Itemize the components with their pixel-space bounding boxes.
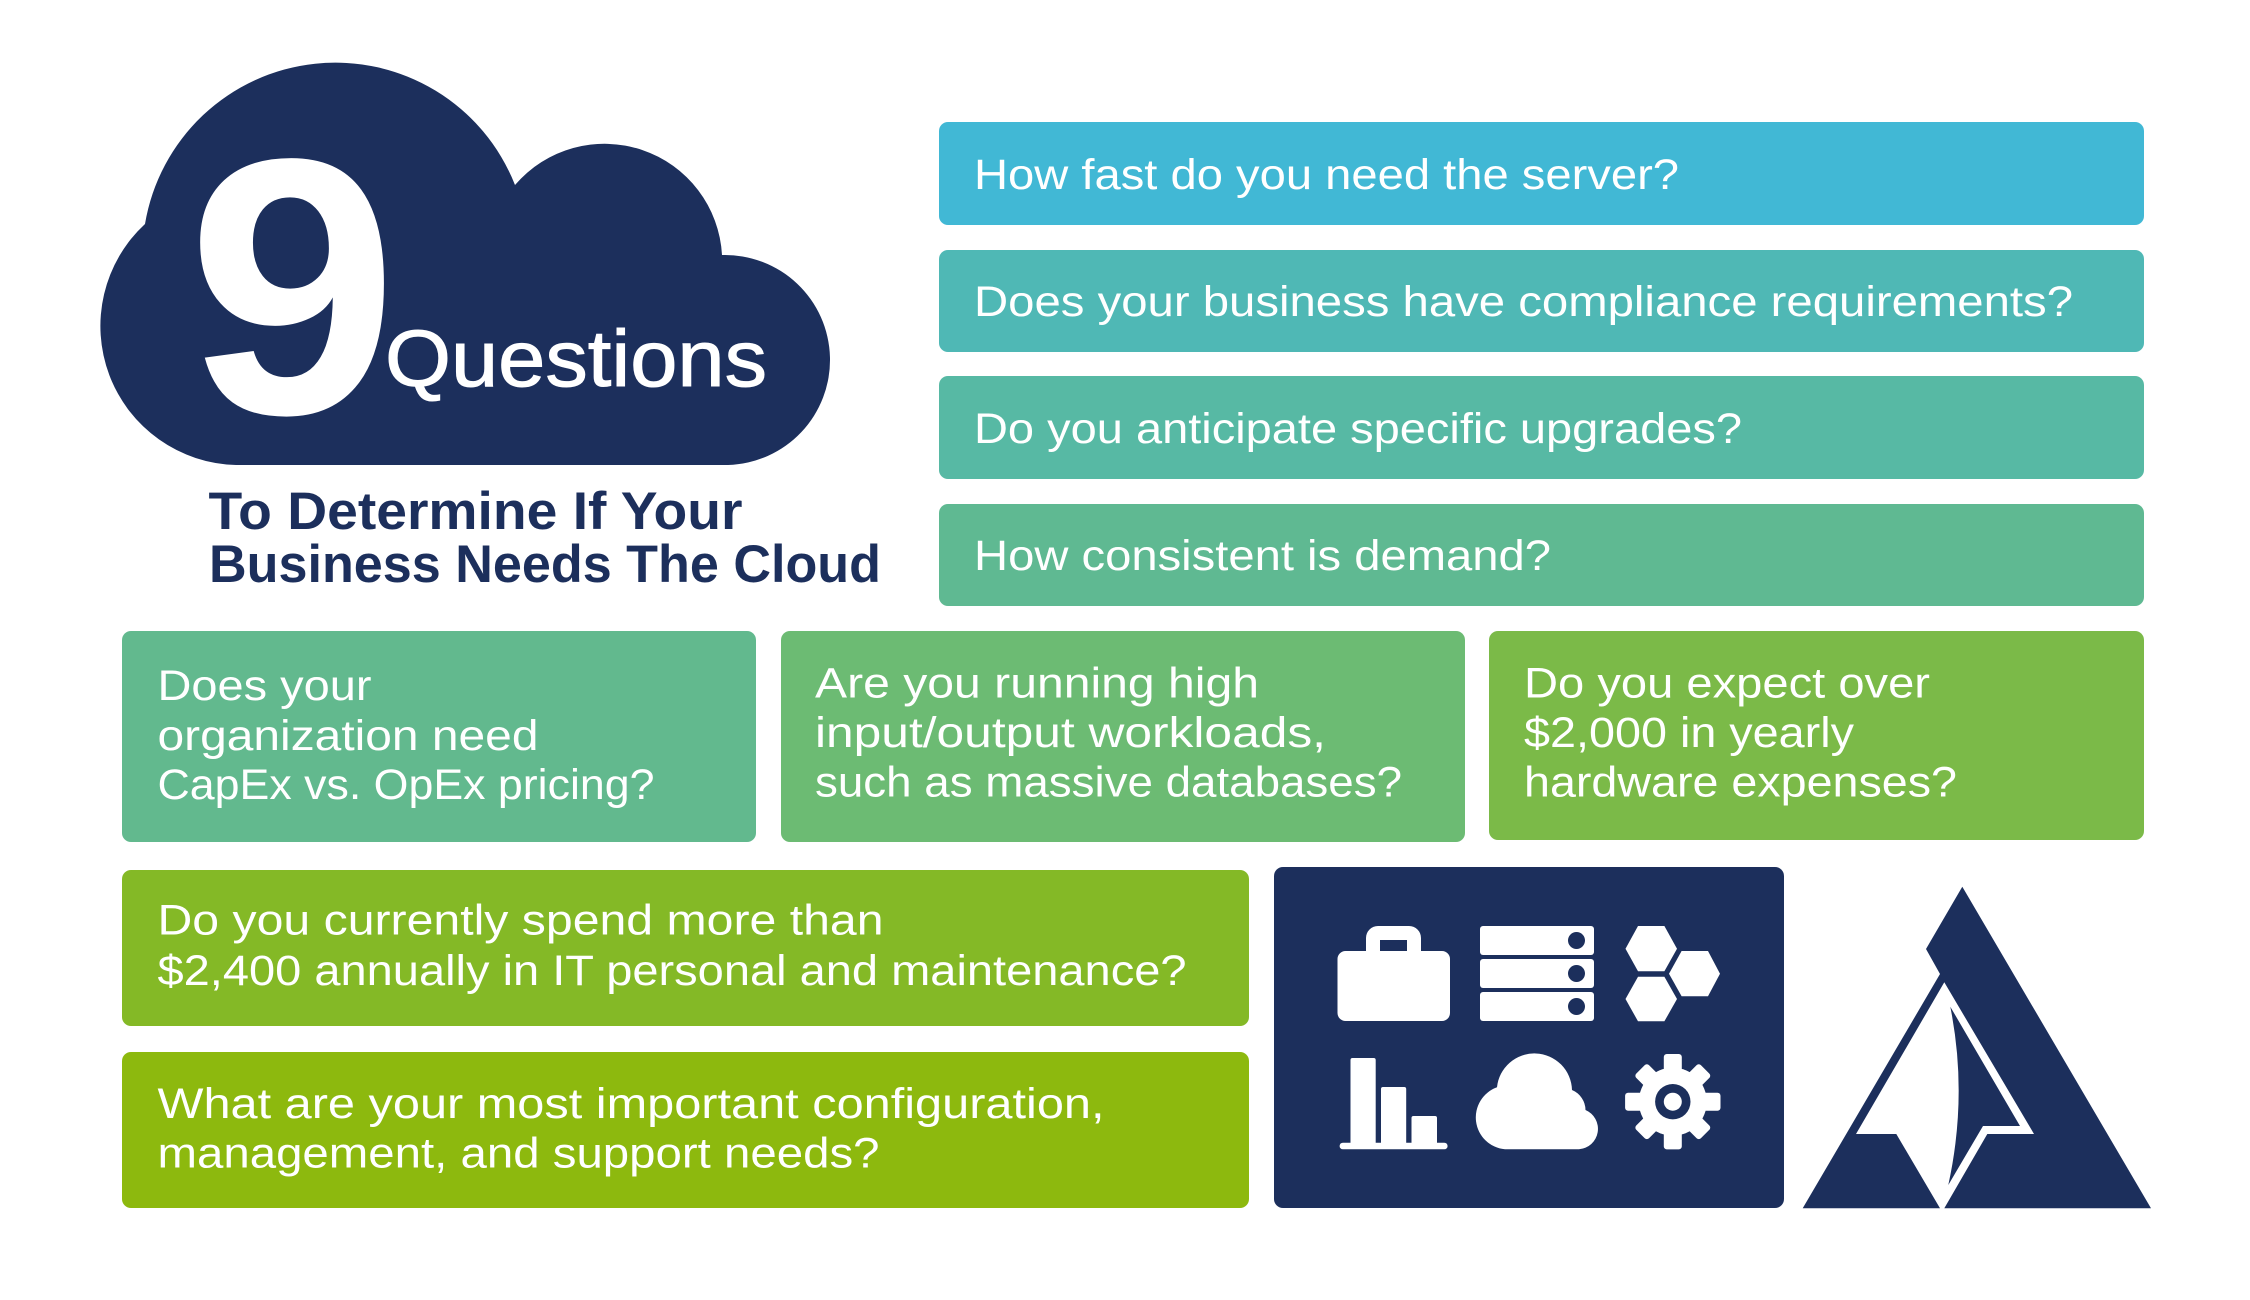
subtitle: Business Needs The Cloud	[209, 535, 881, 594]
cloud shape	[100, 63, 830, 465]
icon: briefcase	[1338, 926, 1450, 1021]
question 5 text: CapEx vs. OpEx pricing?	[158, 761, 654, 809]
question 9 text: management, and support needs?	[158, 1130, 880, 1178]
question panel 3	[939, 376, 2144, 479]
question 6 text: Are you running high	[815, 660, 1259, 708]
question 3 text: Do you anticipate specific upgrades?	[974, 405, 1742, 453]
question 6 text: input/output workloads,	[815, 709, 1326, 757]
question panel 5	[122, 631, 756, 842]
question 9 text	[158, 1080, 1104, 1178]
icon panel	[1274, 867, 1784, 1208]
question 8 text: $2,400 annually in IT personal and maintenance?	[158, 947, 1186, 995]
icon: bar chart	[1340, 1058, 1448, 1149]
question 5 text: Does your	[158, 662, 372, 710]
question panel 7	[1489, 631, 2144, 840]
question 5 text: organization need	[158, 712, 538, 760]
question 9 text: What are your most important configuration,	[158, 1080, 1104, 1128]
icon: server stack	[1480, 926, 1594, 1021]
question panel 4	[939, 504, 2144, 606]
question 4 text: How consistent is demand?	[974, 532, 1551, 580]
subtitle: To Determine If Your	[208, 482, 742, 541]
icon: gear	[1625, 1054, 1720, 1149]
subtitle	[208, 482, 881, 594]
title block: cloud with 9 Questions	[100, 63, 830, 491]
icon: hexagons	[1626, 926, 1720, 1021]
question 8 text	[158, 896, 1186, 995]
question 5 text	[158, 662, 654, 809]
icon: cloud	[1476, 1053, 1598, 1149]
question 6 text: such as massive databases?	[815, 758, 1402, 806]
question panel 2	[939, 250, 2144, 352]
question 1 text: How fast do you need the server?	[974, 151, 1679, 199]
question 2 text: Does your business have compliance requirements?	[974, 278, 2073, 326]
question 7 text: $2,000 in yearly	[1524, 709, 1855, 757]
question 7 text: hardware expenses?	[1524, 758, 1957, 806]
question panel 6	[781, 631, 1465, 842]
question 7 text: Do you expect over	[1524, 660, 1930, 708]
question 7 text	[1524, 660, 1957, 806]
big number 9: 9	[187, 84, 398, 491]
question 8 text: Do you currently spend more than	[158, 896, 884, 944]
word Questions: Questions	[385, 314, 767, 403]
question panel 1	[939, 122, 2144, 225]
logo: triangle with sail	[1803, 887, 2151, 1208]
question 6 text	[815, 660, 1402, 806]
question panel 8	[122, 870, 1249, 1026]
question panel 9	[122, 1052, 1249, 1208]
